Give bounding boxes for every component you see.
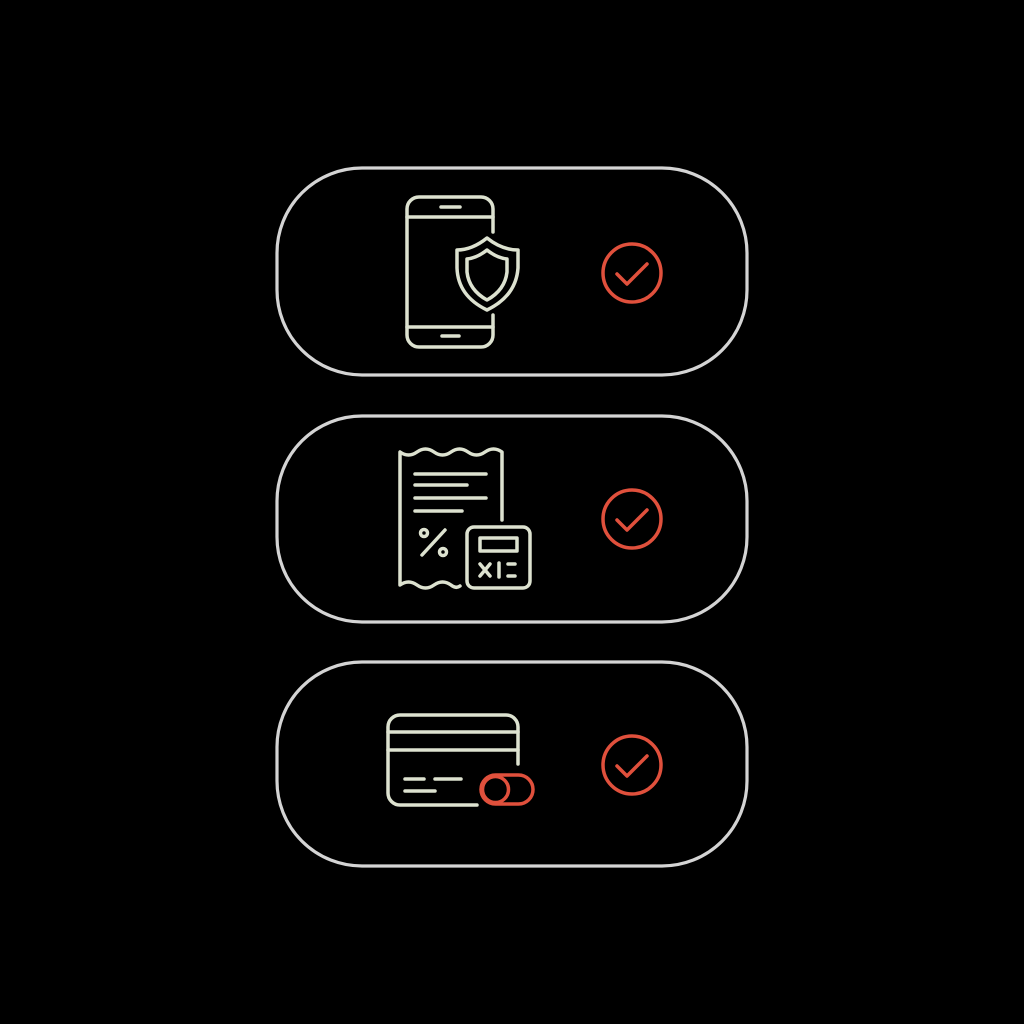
panel: mobile security bbox=[277, 168, 747, 375]
panel: tax receipt bbox=[277, 416, 747, 622]
panel: card payment bbox=[277, 662, 747, 866]
icon: check bbox=[603, 244, 661, 302]
icon: credit card with toggle bbox=[388, 715, 533, 805]
icon: phone with shield bbox=[407, 197, 518, 347]
icon: check bbox=[603, 490, 661, 548]
icon: check bbox=[603, 736, 661, 794]
icon: receipt with calculator bbox=[400, 449, 530, 588]
